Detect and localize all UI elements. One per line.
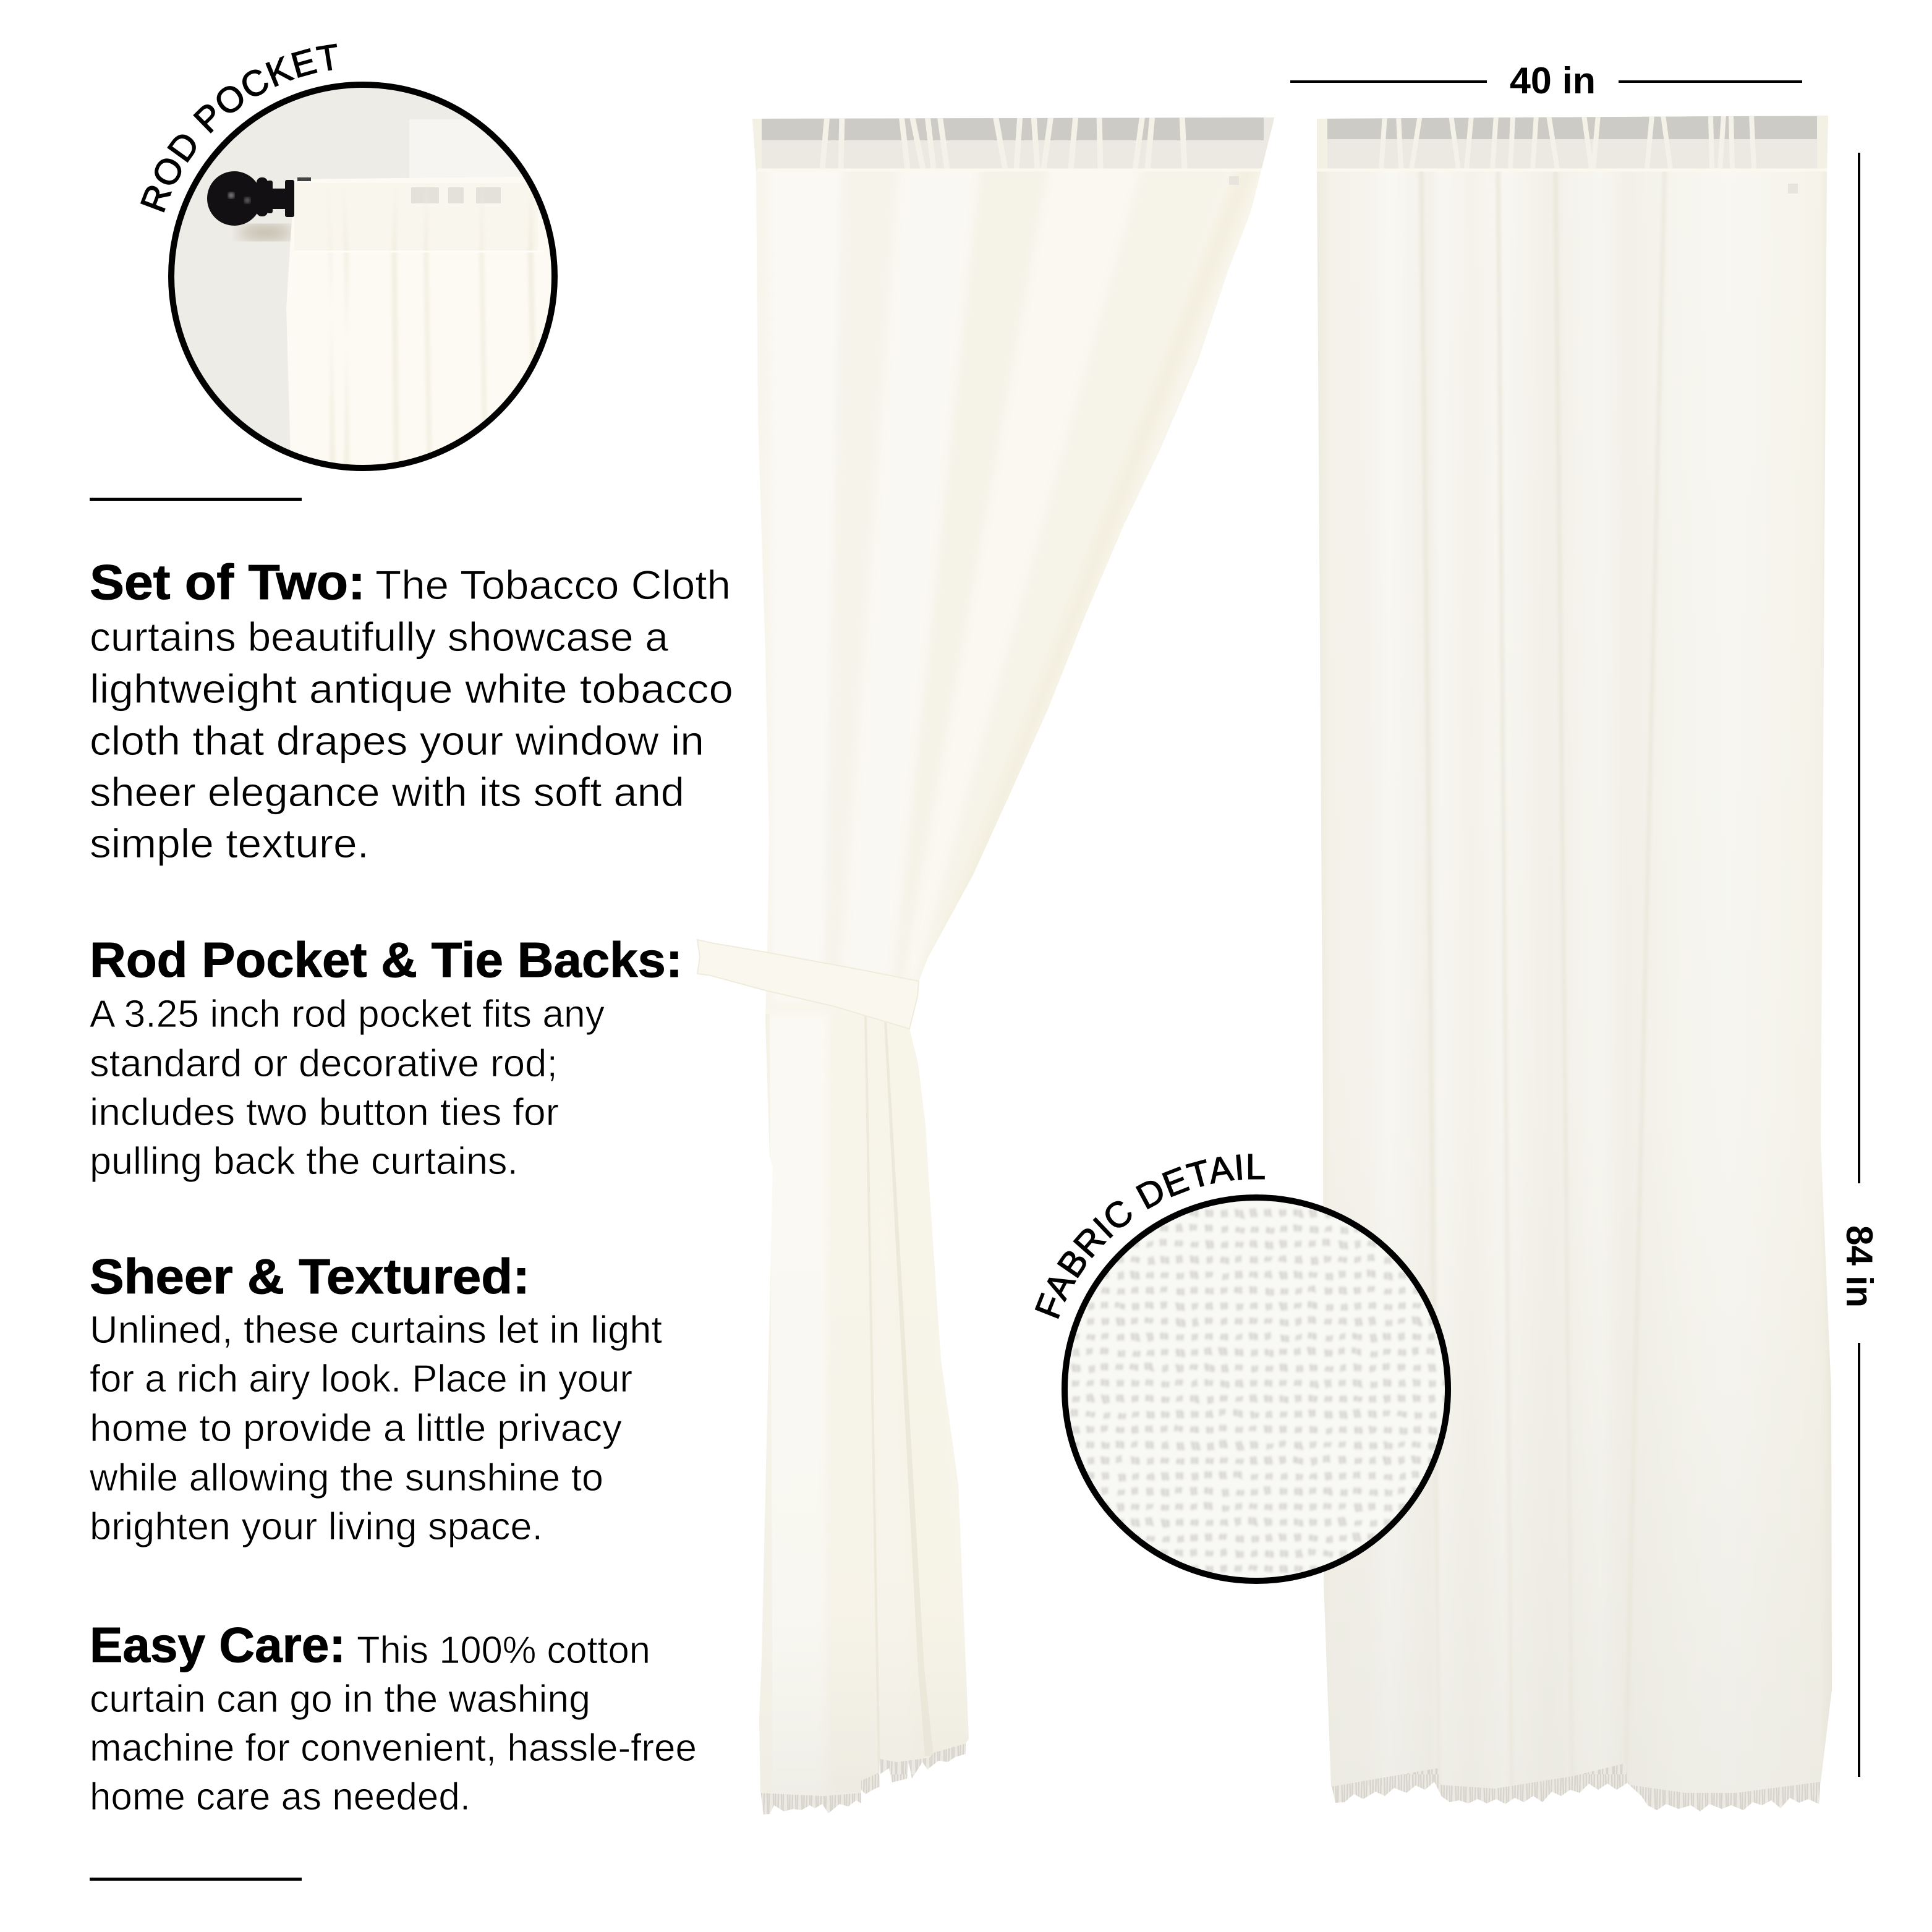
curved label: rod pocket: ROD POCKET: [140, 43, 338, 213]
callout: fabric detail: [1035, 1154, 1451, 1584]
text block: easy care: This 100% cotton: [357, 1629, 650, 1672]
dimension: width 40 in: [1290, 60, 1802, 101]
curved label: fabric detail: FABRIC DETAIL: [1035, 1154, 1265, 1319]
text block: easy care: curtain can go in the washing: [90, 1678, 590, 1721]
callout: rod pocket: [140, 43, 558, 471]
text block: set of two: The Tobacco Cloth: [375, 562, 731, 608]
text block: rod pocket and tie backs: [90, 932, 683, 1183]
text block: easy care: Easy Care:: [90, 1617, 346, 1672]
text block: set of two: cloth that drapes your window in: [90, 718, 704, 764]
dimension: width 40 in: 40 in: [1510, 60, 1596, 101]
text block: rod pocket and tie backs: standard or decorative rod;: [90, 1042, 558, 1085]
text block: sheer and textured: Sheer & Textured:: [90, 1249, 530, 1304]
fringe: left panel: [760, 1742, 966, 1815]
text block: sheer and textured: while allowing the sunshine to: [89, 1457, 603, 1499]
text block: set of two: lightweight antique white tobacco: [90, 666, 733, 712]
dimension: height 84 in: 84 in: [1839, 1225, 1880, 1308]
divider top: [90, 498, 302, 501]
left curtain with tie back: [697, 115, 1280, 1815]
text block: set of two: sheer elegance with its soft and: [90, 769, 684, 815]
fold shading: right panel: [1314, 114, 1833, 1798]
text block: rod pocket and tie backs: includes two button ties for: [90, 1091, 559, 1134]
text block: easy care: machine for convenient, hassle-free: [90, 1727, 697, 1769]
text block: set of two: Set of Two:: [90, 555, 365, 610]
text block: sheer and textured: [89, 1249, 662, 1548]
text block: sheer and textured: home to provide a little privacy: [90, 1407, 622, 1450]
curtain body: right panel: [1317, 116, 1832, 1793]
text block: easy care: home care as needed.: [90, 1776, 470, 1818]
text block: sheer and textured: Unlined, these curtains let in light: [90, 1309, 662, 1351]
photo circle: rod pocket: [174, 88, 551, 465]
text block: sheer and textured: for a rich airy look. Place in your: [90, 1358, 632, 1400]
text block: set of two: curtains beautifully showcase a: [90, 614, 668, 660]
fold shading: left panel: [752, 115, 1280, 1805]
tie back band: [697, 940, 919, 1029]
text block: set of two: [90, 555, 733, 866]
dimension: height 84 in: [1839, 153, 1880, 1777]
text block: rod pocket and tie backs: A 3.25 inch rod pocket fits any: [90, 993, 605, 1036]
text block: rod pocket and tie backs: pulling back the curtains.: [90, 1140, 518, 1183]
icon: curtain rod finial: [207, 171, 311, 226]
right curtain: [1314, 114, 1833, 1811]
text block: set of two: simple texture.: [90, 820, 369, 866]
text block: sheer and textured: brighten your living space.: [90, 1505, 543, 1548]
divider bottom: [90, 1878, 302, 1881]
curtain body: left panel: [752, 117, 1274, 1796]
fringe: right panel: [1331, 1760, 1821, 1811]
text block: easy care: [90, 1617, 697, 1818]
text block: rod pocket and tie backs: Rod Pocket & Tie Backs:: [90, 932, 683, 987]
ring: fabric circle: [1065, 1198, 1448, 1581]
photo circle: fabric weave: [1068, 1201, 1445, 1578]
ring: rod pocket circle: [171, 85, 555, 468]
